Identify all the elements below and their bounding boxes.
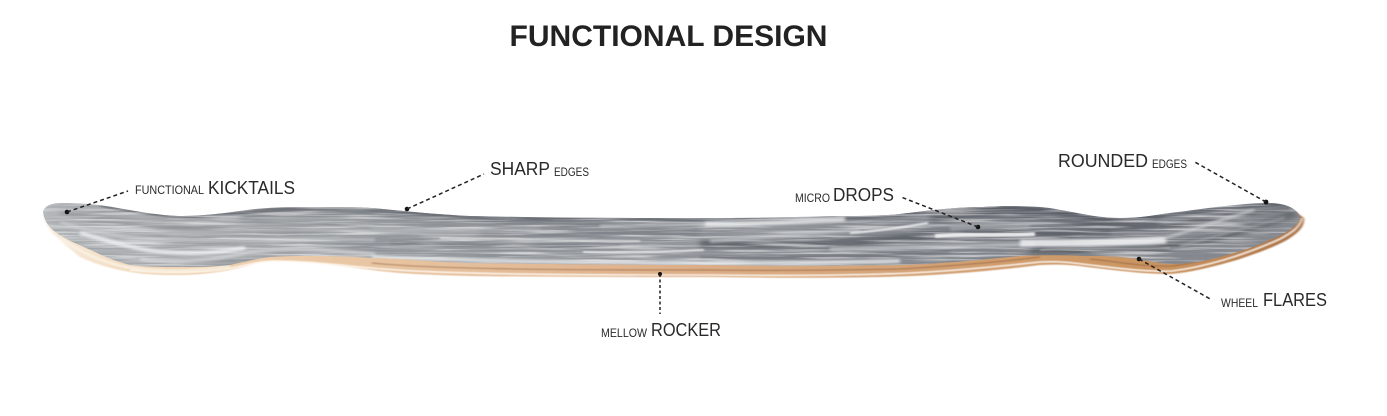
callout: sharp edges: EDGES xyxy=(554,165,589,179)
streak texture xyxy=(46,205,1291,267)
callout: rounded edges xyxy=(1058,151,1268,204)
callout: functional kicktails xyxy=(65,178,295,214)
callout: functional kicktails: FUNCTIONAL xyxy=(135,183,204,197)
callout: rounded edges: ROUNDED xyxy=(1058,151,1148,171)
deck wood ply edge xyxy=(43,212,1304,278)
callout: micro drops: MICRO xyxy=(795,191,830,205)
callout: rounded edges: EDGES xyxy=(1152,157,1187,171)
dark upper edge xyxy=(100,204,1290,220)
callout: micro drops xyxy=(795,185,980,229)
callout: wheel flares: FLARES xyxy=(1263,290,1327,310)
callout: micro drops: DROPS xyxy=(833,185,894,205)
callout: sharp edges: SHARP xyxy=(490,159,550,179)
callout: mellow rocker: MELLOW xyxy=(601,326,648,340)
white streaks xyxy=(80,233,245,253)
callout: sharp edges xyxy=(405,159,589,211)
dark streaks xyxy=(480,232,700,234)
callout: functional kicktails: KICKTAILS xyxy=(208,178,295,198)
callout: mellow rocker xyxy=(601,272,721,340)
callout: wheel flares: WHEEL xyxy=(1221,296,1258,310)
callout: wheel flares xyxy=(1137,257,1327,310)
skateboard deck xyxy=(42,203,1306,278)
title: FUNCTIONAL DESIGN xyxy=(510,20,828,53)
deck grey painted top xyxy=(43,203,1300,267)
callout: mellow rocker: ROCKER xyxy=(651,320,721,340)
